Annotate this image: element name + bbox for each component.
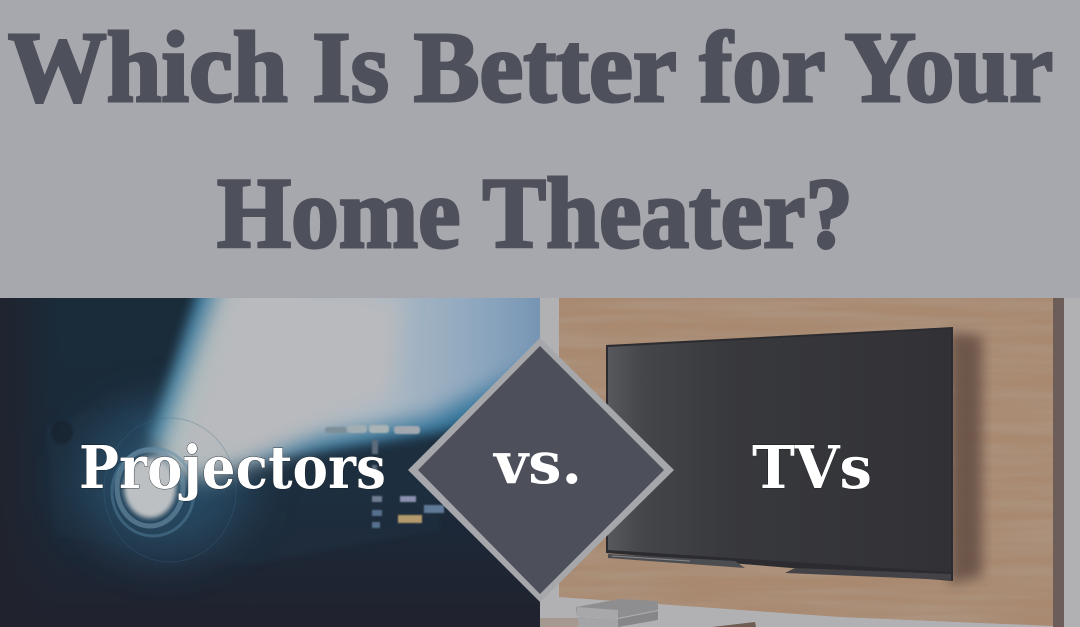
diamond fill xyxy=(418,346,664,594)
tv screen xyxy=(608,333,886,568)
center diamond badge xyxy=(408,338,674,602)
projector dark vent xyxy=(51,420,73,444)
tv frame xyxy=(606,327,953,581)
vs label: vs. xyxy=(492,429,582,497)
floor corner xyxy=(540,618,580,627)
projectors label: Projectors xyxy=(79,433,386,502)
light beam xyxy=(150,270,560,478)
title xyxy=(8,11,1053,269)
panel: projector photo xyxy=(0,298,540,627)
title banner background xyxy=(0,0,1080,298)
blue glow around lens xyxy=(80,408,250,552)
projector body xyxy=(104,434,224,528)
lens rings xyxy=(104,418,236,562)
wood panel xyxy=(559,298,1053,627)
books xyxy=(576,599,756,627)
title: Which Is Better for Your xyxy=(8,11,1053,123)
left edge vignette xyxy=(0,298,18,542)
lens highlight xyxy=(124,458,176,518)
tvs label: TVs xyxy=(752,433,872,502)
tv bottom bezel xyxy=(608,554,745,568)
title: Home Theater? xyxy=(217,157,853,269)
indicator lights xyxy=(325,425,444,528)
tv shadow xyxy=(950,332,982,584)
wood grain xyxy=(559,298,1053,627)
wood panel dark edge xyxy=(1053,298,1064,627)
far object xyxy=(712,622,756,627)
wall xyxy=(540,298,1080,627)
panel: tv photo xyxy=(540,298,1080,627)
diamond border xyxy=(408,338,674,602)
bright core xyxy=(348,303,399,394)
blue beam halo xyxy=(146,298,518,468)
